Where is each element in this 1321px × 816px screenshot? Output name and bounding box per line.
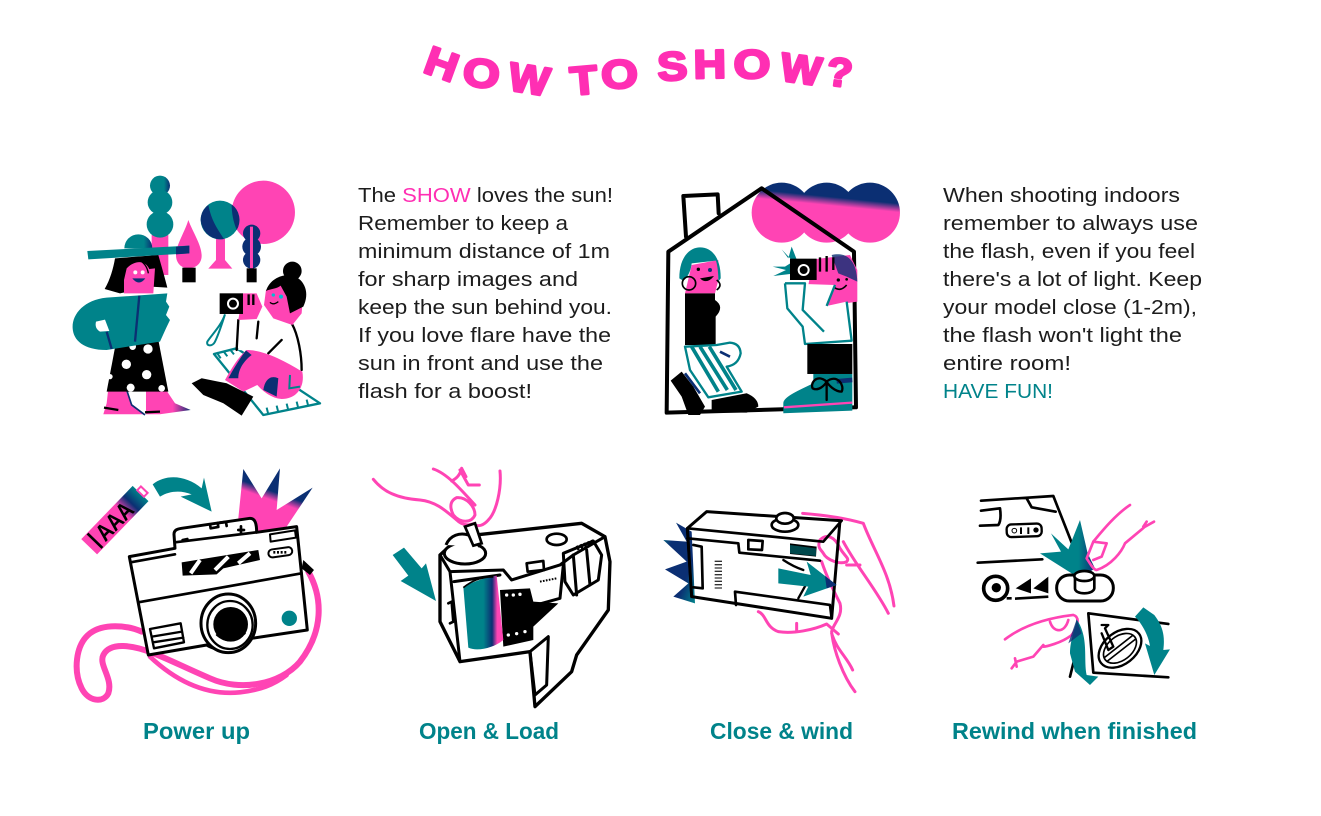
text block: outdoor tip: sun in front and use the (358, 352, 603, 375)
text block: outdoor tip: Remember to keep a (358, 212, 569, 235)
figure: standing woman with hat (73, 234, 191, 415)
icon: AAA battery: AAA (90, 497, 140, 547)
text block: indoor tip: the flash won't light the (943, 324, 1182, 347)
text block: outdoor tip: minimum distance of 1m (358, 240, 610, 263)
illustration: power up (77, 468, 319, 700)
title: W (778, 44, 825, 95)
text block: outdoor tip: If you love flare have the (358, 324, 611, 347)
figure: photographer with flash (773, 247, 857, 413)
text block: indoor tip (943, 184, 1202, 403)
icon: sun (232, 181, 295, 244)
icon: hand (758, 513, 894, 692)
text block: indoor tip: HAVE FUN! (943, 380, 1053, 403)
title: ? (824, 49, 855, 96)
icon: flash burst (238, 468, 313, 532)
icon: AAA battery (80, 481, 155, 557)
text block: indoor tip: the flash, even if you feel (943, 240, 1195, 263)
figure: seated woman with camera (192, 262, 320, 416)
title: S (656, 43, 688, 89)
arrow: rotate right (1135, 607, 1170, 675)
arrow: teal down-right (393, 548, 436, 601)
text block: outdoor tip: flash for a boost! (358, 380, 532, 403)
caption: close and wind: Close & wind (710, 718, 853, 744)
title: H (419, 38, 464, 90)
text block: outdoor tip (358, 184, 613, 403)
icon: camera (129, 518, 307, 655)
caption: rewind when finished: Rewind when finished (952, 718, 1197, 744)
icon: clouds (752, 183, 900, 243)
title: O (600, 52, 639, 98)
caption: power up: Power up (143, 718, 250, 744)
arrow: rotate left (1070, 619, 1098, 685)
title: O (461, 50, 502, 98)
icon: hand (373, 468, 500, 526)
caption: open and load: Open & Load (419, 718, 559, 744)
icon: closed camera (687, 512, 842, 618)
title: W (506, 54, 554, 105)
title: H (693, 42, 726, 87)
icon: camera top detail (978, 496, 1072, 600)
arrow: curved teal (153, 477, 212, 512)
text block: outdoor tip: The SHOW loves the sun! (358, 184, 613, 207)
illustration: open and load (373, 468, 610, 707)
text block: outdoor tip: for sharp images and (358, 268, 578, 291)
figure: seated woman (671, 247, 758, 415)
title (419, 38, 855, 105)
text block: outdoor tip: keep the sun behind you. (358, 296, 612, 319)
icon: pink finger bottom (1005, 615, 1078, 668)
icon: rewind dial (1070, 613, 1168, 677)
illustration: rewind when finished (978, 496, 1170, 685)
icon: pink finger top (1087, 505, 1154, 570)
icon: teal burst on button (1040, 520, 1095, 575)
text block: indoor tip: remember to always use (943, 212, 1198, 235)
icon: trees (147, 176, 261, 282)
text block: indoor tip: When shooting indoors (943, 184, 1180, 207)
icon: rewind button (1057, 571, 1113, 601)
icon: open camera (440, 523, 610, 707)
illustration: indoor scene with house and flash (667, 183, 900, 415)
text block: indoor tip: your model close (1-2m), (943, 296, 1197, 319)
text block: indoor tip: entire room! (943, 352, 1071, 375)
title: O (734, 42, 770, 87)
icon: flash burst (663, 523, 695, 603)
illustration: close and wind (663, 512, 894, 692)
icon: house outline (667, 188, 856, 413)
text block: indoor tip: there's a lot of light. Keep (943, 268, 1202, 291)
title: T (568, 57, 599, 104)
illustration: outdoor scene with two women, trees and sun (73, 176, 320, 416)
icon: strap (77, 572, 319, 700)
